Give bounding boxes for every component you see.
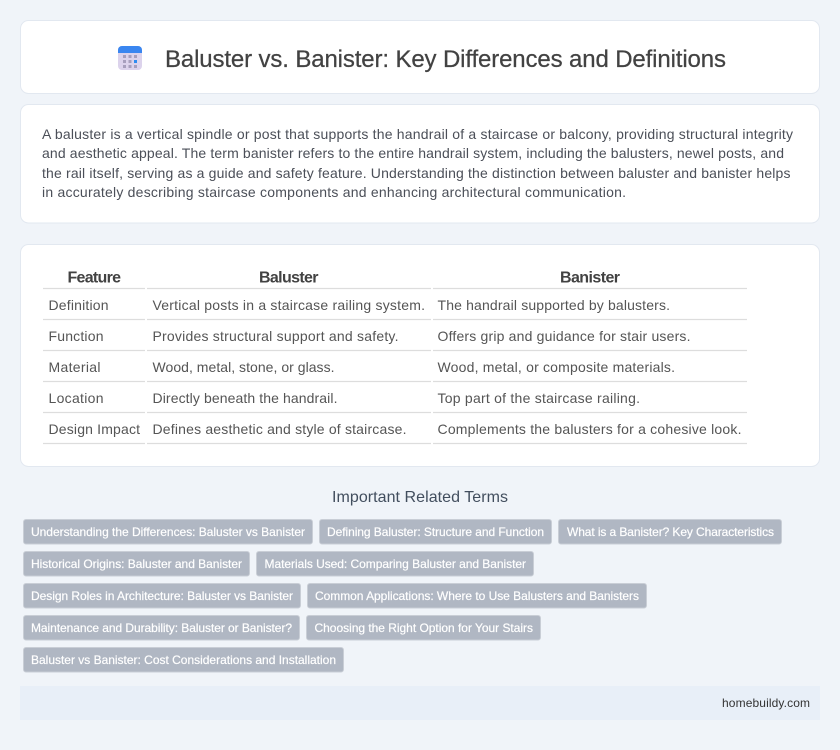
tag xyxy=(24,616,300,640)
tag: Design Roles in Architecture: Baluster vs Banister xyxy=(31,589,293,603)
footer source: homebuildy.com xyxy=(722,696,810,710)
row: location: Directly beneath the handrail. xyxy=(152,390,338,406)
table header xyxy=(68,270,620,286)
text block: introduction xyxy=(42,126,793,200)
table rules xyxy=(43,288,747,444)
text block: introduction: A baluster is a vertical spindle or post that supports the handrail of a staircase or balcony, providing structural integrity xyxy=(42,126,793,142)
tag xyxy=(24,648,344,672)
tag: Understanding the Differences: Baluster vs Banister xyxy=(31,525,305,539)
row: location: Location xyxy=(48,390,104,406)
tag: What is a Banister? Key Characteristics xyxy=(567,525,774,539)
text block: introduction: in accurately describing staircase components and enhancing architectural communication. xyxy=(42,184,626,200)
tag xyxy=(320,520,552,544)
row: definition: Vertical posts in a staircase railing system. xyxy=(152,297,425,313)
tag: Defining Baluster: Structure and Function xyxy=(327,525,544,539)
row: design impact: Design Impact xyxy=(48,421,140,437)
row: definition: The handrail supported by balusters. xyxy=(438,297,670,313)
tag xyxy=(308,584,646,608)
row: definition: Definition xyxy=(48,297,108,313)
row: function: Function xyxy=(48,328,104,344)
tag xyxy=(558,520,782,544)
tag: Materials Used: Comparing Baluster and Banister xyxy=(264,557,526,571)
row: location xyxy=(48,390,640,406)
panel: comparison table xyxy=(20,244,820,466)
row: location: Top part of the staircase railing. xyxy=(438,390,640,406)
icon: calendar xyxy=(118,46,142,70)
tag: Common Applications: Where to Use Balusters and Banisters xyxy=(315,589,639,603)
tag: Choosing the Right Option for Your Stairs xyxy=(314,621,533,635)
tag xyxy=(306,616,540,640)
tag: Baluster vs Banister: Cost Considerations and Installation xyxy=(31,653,336,667)
tag xyxy=(256,552,534,576)
row: definition xyxy=(48,297,670,313)
table header: Baluster xyxy=(259,270,318,286)
table header: Banister xyxy=(560,270,620,286)
tag xyxy=(24,552,250,576)
footer xyxy=(20,686,820,720)
tag xyxy=(24,584,300,608)
row: design impact: Defines aesthetic and style of staircase. xyxy=(152,421,406,437)
row: design impact xyxy=(48,421,742,437)
row: material xyxy=(48,359,675,375)
title: Baluster vs. Banister: Key Differences and Definitions xyxy=(165,46,726,73)
row: design impact: Complements the balusters for a cohesive look. xyxy=(438,421,742,437)
row: function xyxy=(48,328,690,344)
row: material: Wood, metal, stone, or glass. xyxy=(152,359,334,375)
panel: header xyxy=(20,20,820,94)
table header: Feature xyxy=(68,270,121,286)
heading: important related terms: Important Related Terms xyxy=(332,489,508,506)
row: material: Material xyxy=(48,359,100,375)
text block: introduction: the rail itself, serving as a guide and safety feature. Understanding the distinction between baluster and banister helps xyxy=(42,165,790,181)
tag: Maintenance and Durability: Baluster or Banister? xyxy=(31,621,292,635)
row: function: Provides structural support and safety. xyxy=(152,328,398,344)
text block: introduction: and aesthetic appeal. The term banister refers to the entire handrail system, including the balusters, newel posts, and xyxy=(42,145,784,161)
tag xyxy=(24,520,312,544)
row: function: Offers grip and guidance for stair users. xyxy=(438,328,690,344)
panel: introduction xyxy=(20,104,820,223)
tag: Historical Origins: Baluster and Banister xyxy=(31,557,242,571)
panel: related term tags xyxy=(24,520,782,672)
row: material: Wood, metal, or composite materials. xyxy=(438,359,675,375)
